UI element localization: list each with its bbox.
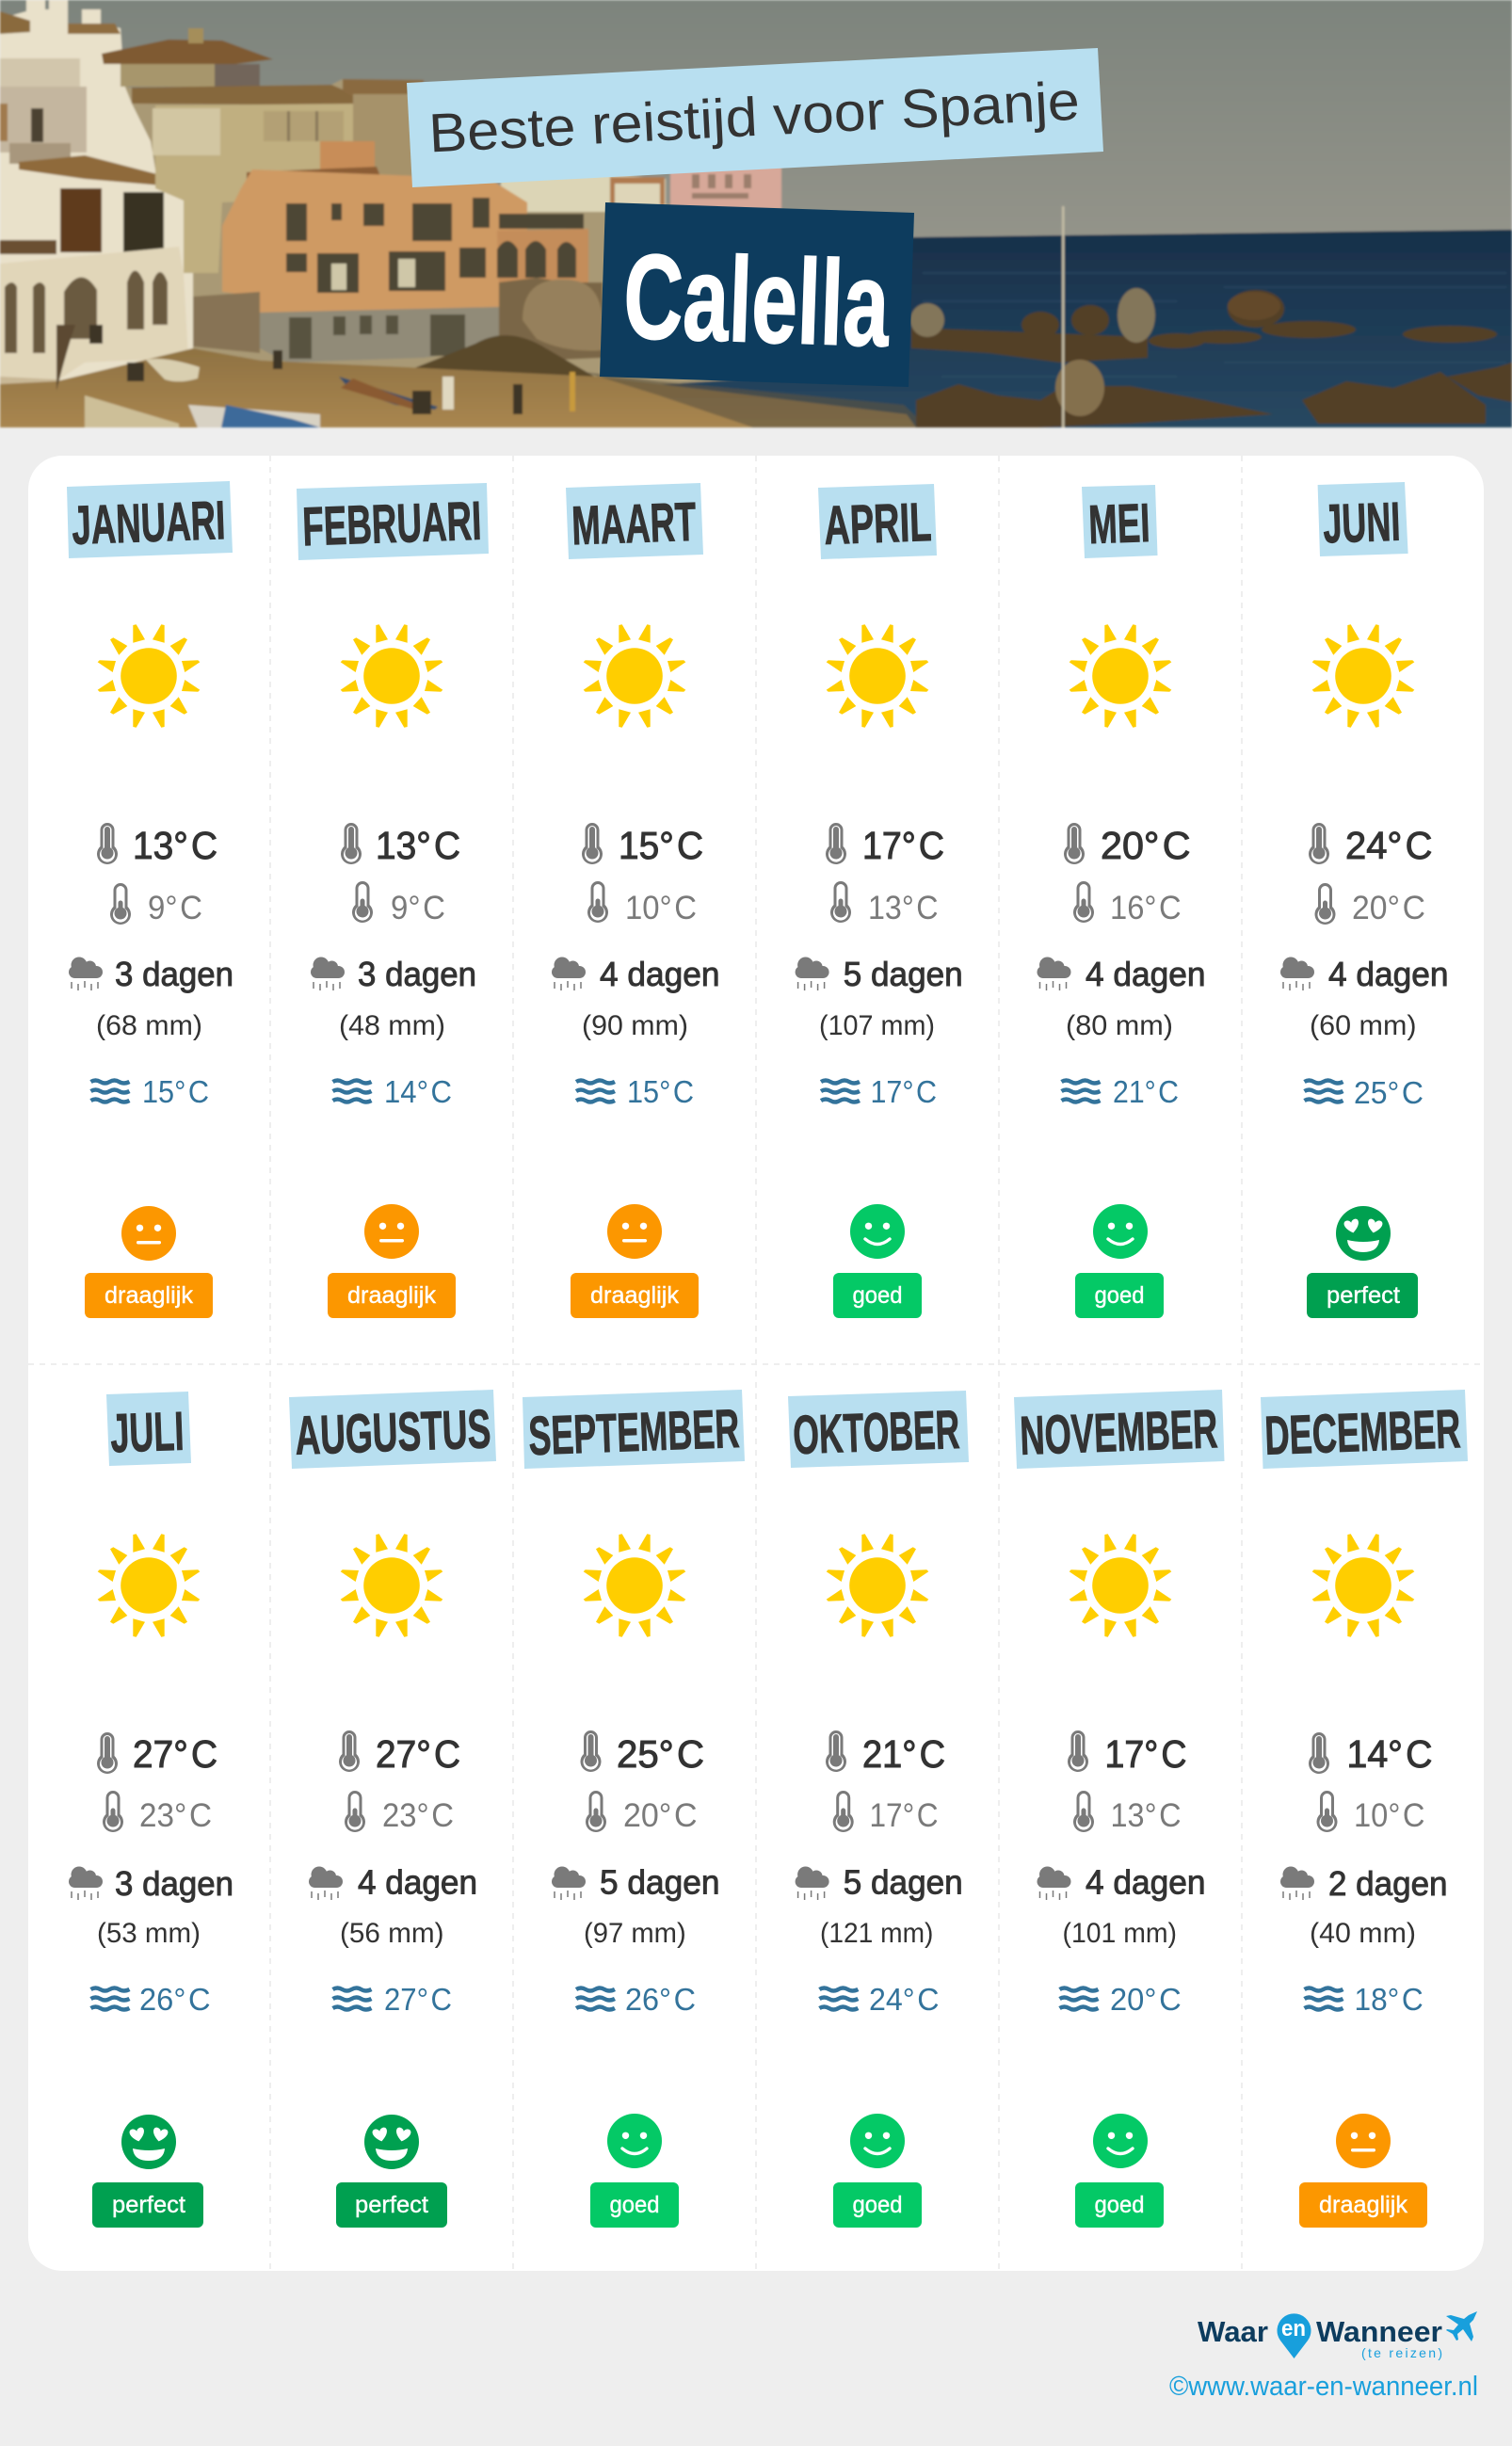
month label — [1014, 1390, 1224, 1469]
sea temperature — [1305, 1982, 1424, 2017]
month label: MEI — [1087, 492, 1150, 555]
minimum temperature: 10° C — [1354, 1797, 1425, 1834]
month label: NOVEMBER — [1019, 1398, 1218, 1467]
rain days: 5 dagen — [844, 1863, 963, 1902]
icon: sun — [584, 624, 685, 728]
panel: juni — [1280, 482, 1448, 1318]
maximum temperature: 25° C — [617, 1732, 704, 1776]
rain days: 5 dagen — [600, 1863, 719, 1902]
sea temperature: 15° C — [142, 1074, 209, 1109]
maximum temperature — [580, 1730, 704, 1776]
icon: sun — [1070, 1534, 1171, 1637]
maximum temperature — [826, 823, 944, 867]
minimum temperature — [587, 881, 697, 926]
minimum temperature: 16° C — [1110, 890, 1182, 926]
minimum temperature — [1314, 883, 1425, 926]
rating — [833, 1204, 922, 1318]
minimum temperature — [833, 1791, 938, 1834]
rating — [571, 1204, 699, 1318]
rating: draaglijk — [1319, 2192, 1407, 2218]
maximum temperature — [341, 823, 460, 867]
sea temperature: 26° C — [139, 1982, 211, 2017]
panel: climate calendar card — [28, 456, 1484, 2271]
sea temperature: 20° C — [1110, 1982, 1182, 2017]
panel: november — [1014, 1390, 1224, 2228]
maximum temperature: 14° C — [1346, 1732, 1433, 1776]
maximum temperature: 27° C — [376, 1732, 460, 1776]
maximum temperature — [826, 1730, 945, 1776]
month label — [67, 481, 233, 558]
rain days: 4 dagen — [1086, 1863, 1205, 1902]
minimum temperature: 9° C — [148, 890, 202, 926]
minimum temperature: 23° C — [382, 1797, 454, 1834]
banner: subtitle: Beste reistijd voor Spanje — [427, 71, 1081, 164]
rain days — [309, 1863, 477, 1902]
minimum temperature: 9° C — [391, 890, 445, 926]
minimum temperature: 13° C — [1111, 1797, 1181, 1834]
minimum temperature — [1073, 881, 1182, 926]
month label — [818, 484, 937, 559]
rating — [85, 1206, 213, 1318]
rating: goed — [1094, 2192, 1145, 2218]
maximum temperature: 15° C — [619, 824, 703, 867]
minimum temperature — [586, 1791, 698, 1834]
rating — [92, 2115, 203, 2228]
rain days — [1280, 1864, 1448, 1903]
maximum temperature — [582, 823, 703, 867]
sea temperature — [90, 1982, 211, 2017]
panel: februari — [297, 483, 489, 1318]
minimum temperature: 17° C — [870, 1797, 938, 1834]
panel: maart — [552, 483, 719, 1318]
minimum temperature: 20° C — [623, 1797, 698, 1834]
icon: sun — [341, 1534, 442, 1637]
rainfall: (48 mm) — [339, 1010, 445, 1041]
panel: augustus — [289, 1390, 496, 2228]
month label: OKTOBER — [792, 1399, 960, 1466]
sea temperature — [819, 1982, 940, 2017]
maximum temperature: 21° C — [862, 1732, 945, 1776]
rating: draaglijk — [347, 1282, 436, 1309]
month label: FEBRUARI — [301, 491, 482, 557]
month label — [523, 1390, 745, 1469]
logo: Waar en Wanneer: en — [1281, 2316, 1306, 2341]
rainfall: (107 mm) — [819, 1010, 935, 1041]
panel: december — [1261, 1390, 1468, 2228]
month label: JULI — [109, 1401, 185, 1464]
panel: oktober — [788, 1391, 969, 2228]
sea temperature — [1060, 1982, 1182, 2017]
month label: SEPTEMBER — [527, 1398, 740, 1467]
month label — [1082, 485, 1158, 558]
website credit: ©www.waar-en-wanneer.nl — [1169, 2372, 1478, 2402]
icon: sun — [98, 1534, 200, 1637]
maximum temperature: 17° C — [1105, 1732, 1186, 1776]
sea temperature: 26° C — [625, 1982, 696, 2017]
sea temperature — [1062, 1074, 1179, 1109]
panel: januari — [67, 481, 233, 1318]
minimum temperature — [830, 881, 938, 926]
rating: goed — [1094, 1282, 1145, 1309]
sea temperature — [1305, 1075, 1424, 1110]
sea temperature: 25° C — [1354, 1075, 1424, 1110]
rain days: 4 dagen — [1328, 955, 1448, 993]
month label — [1318, 482, 1408, 556]
sea temperature: 17° C — [870, 1074, 937, 1109]
maximum temperature — [1068, 1730, 1186, 1776]
rain days: 2 dagen — [1328, 1864, 1448, 1903]
icon: sun — [584, 1534, 685, 1637]
maximum temperature — [97, 823, 217, 867]
month label: JANUARI — [71, 490, 226, 556]
month label — [289, 1390, 496, 1469]
maximum temperature: 13° C — [133, 824, 217, 867]
rainfall: (40 mm) — [1310, 1918, 1416, 1949]
maximum temperature — [97, 1732, 217, 1776]
banner: destination title — [600, 202, 914, 387]
minimum temperature — [352, 881, 445, 926]
rating: draaglijk — [590, 1282, 679, 1309]
banner: destination title: Calella — [621, 229, 892, 373]
sea temperature: 24° C — [869, 1982, 940, 2017]
month label — [297, 483, 489, 560]
banner: subtitle — [407, 48, 1103, 187]
month label: AUGUSTUS — [294, 1398, 491, 1467]
rain days: 4 dagen — [600, 955, 719, 993]
panel: mei — [1037, 485, 1205, 1318]
rating — [1307, 1206, 1418, 1318]
rain days: 3 dagen — [358, 955, 476, 993]
sea temperature — [576, 1982, 696, 2017]
sea temperature: 14° C — [384, 1074, 452, 1109]
rainfall: (56 mm) — [340, 1918, 444, 1949]
minimum temperature: 20° C — [1352, 890, 1425, 926]
logo: Waar en Wanneer — [1198, 2311, 1477, 2360]
rating — [328, 1204, 456, 1318]
month label — [788, 1391, 969, 1468]
icon: sun — [1312, 1534, 1414, 1637]
maximum temperature: 24° C — [1345, 824, 1433, 867]
sea temperature: 21° C — [1113, 1074, 1179, 1109]
icon: sun — [98, 624, 200, 728]
rainfall: (60 mm) — [1310, 1010, 1416, 1041]
rainfall: (121 mm) — [820, 1918, 933, 1949]
minimum temperature — [1073, 1791, 1181, 1834]
rainfall: (90 mm) — [582, 1010, 688, 1041]
header photo: Calella coastline — [0, 0, 1512, 427]
minimum temperature — [103, 1791, 212, 1834]
month label — [566, 483, 703, 559]
sea temperature — [333, 1982, 452, 2017]
minimum temperature — [1316, 1791, 1425, 1834]
sea temperature — [576, 1074, 694, 1109]
sea temperature — [333, 1074, 452, 1109]
rating: perfect — [355, 2192, 428, 2218]
rain days: 3 dagen — [115, 955, 233, 993]
rating — [1299, 2114, 1427, 2228]
rain days: 4 dagen — [1086, 955, 1205, 993]
maximum temperature — [1309, 1732, 1433, 1776]
sea temperature — [90, 1074, 209, 1109]
rating — [1075, 2114, 1164, 2228]
minimum temperature: 13° C — [868, 890, 938, 926]
sea temperature — [821, 1074, 937, 1109]
rainfall: (68 mm) — [96, 1010, 202, 1041]
rainfall: (97 mm) — [584, 1918, 686, 1949]
rainfall: (80 mm) — [1066, 1010, 1173, 1041]
rating: goed — [853, 2192, 902, 2218]
rain days: 5 dagen — [844, 955, 963, 993]
icon: sun — [827, 624, 928, 728]
rainfall: (101 mm) — [1062, 1918, 1177, 1949]
icon: sun — [1070, 624, 1171, 728]
maximum temperature — [339, 1730, 460, 1776]
rating: perfect — [1327, 1282, 1400, 1309]
rating: draaglijk — [105, 1282, 193, 1309]
minimum temperature: 23° C — [139, 1797, 212, 1834]
panel: september — [523, 1390, 745, 2228]
rain days — [311, 955, 476, 993]
icon: map pin — [1277, 2313, 1311, 2358]
maximum temperature — [1064, 823, 1191, 867]
icon: sun — [341, 624, 442, 728]
icon: sun — [1312, 624, 1414, 728]
rainfall: (53 mm) — [97, 1918, 201, 1949]
sea temperature: 18° C — [1354, 1982, 1424, 2017]
maximum temperature: 20° C — [1101, 824, 1191, 867]
maximum temperature: 17° C — [862, 824, 944, 867]
rain days: 4 dagen — [358, 1863, 477, 1902]
minimum temperature — [110, 883, 202, 926]
rating — [336, 2115, 447, 2228]
rain days: 3 dagen — [115, 1864, 233, 1903]
logo: Waar en Wanneer: Wanneer — [1316, 2315, 1442, 2348]
month label: MAART — [571, 491, 697, 556]
rating — [590, 2114, 679, 2228]
sea temperature: 15° C — [627, 1074, 694, 1109]
month label — [106, 1392, 191, 1466]
logo: Waar en Wanneer: (te reizen) — [1361, 2345, 1442, 2360]
panel: juli — [69, 1392, 233, 2228]
icon: plane — [1446, 2311, 1477, 2341]
maximum temperature — [1309, 823, 1433, 867]
sea temperature: 27° C — [384, 1982, 452, 2017]
rating: goed — [610, 2192, 659, 2218]
rating: perfect — [112, 2192, 185, 2218]
month label: JUNI — [1322, 491, 1401, 555]
icon: sun — [827, 1534, 928, 1637]
maximum temperature: 13° C — [376, 824, 460, 867]
panel: april — [796, 484, 963, 1318]
maximum temperature: 27° C — [133, 1732, 217, 1776]
rating — [833, 2114, 922, 2228]
logo: Waar en Wanneer: Waar — [1198, 2315, 1268, 2348]
minimum temperature — [345, 1791, 454, 1834]
rating: goed — [853, 1282, 902, 1309]
rating — [1075, 1204, 1164, 1318]
month label: APRIL — [823, 491, 932, 556]
minimum temperature: 10° C — [625, 890, 697, 926]
